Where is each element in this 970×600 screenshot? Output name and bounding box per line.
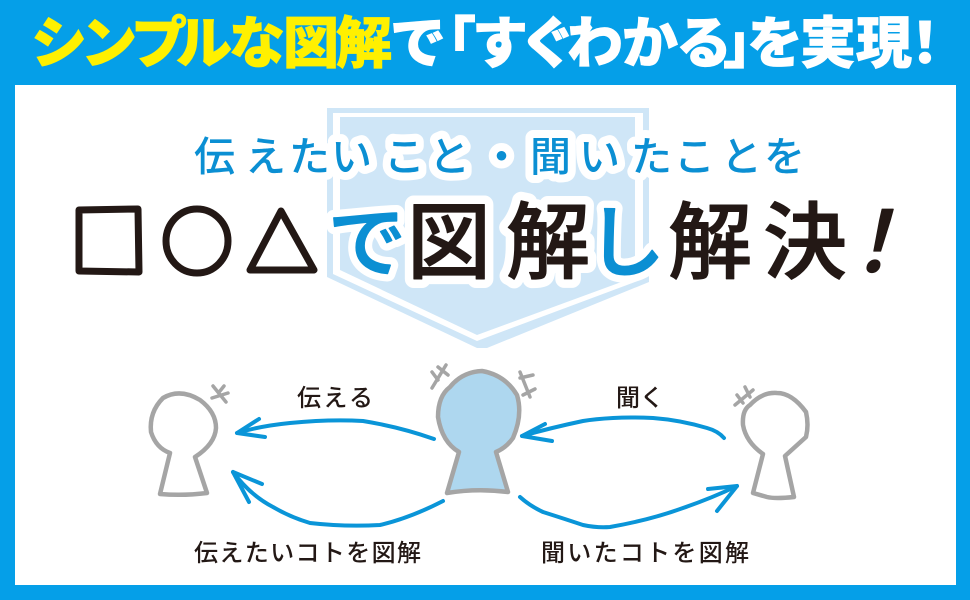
headline text: zukai: 図解 [407, 196, 590, 290]
person center [432, 365, 535, 493]
title banner: で「すぐわかる」を実現！ [390, 12, 953, 75]
subtitle: what you want to tell, what you heard: 伝えたいこと・聞いたことを [194, 134, 805, 180]
headline text: zukai: 図解 [407, 196, 590, 290]
shield background shape [327, 108, 649, 348]
label: illustrate what you heard: 聞いたコトを図解 [541, 540, 749, 567]
label: listen: 聞く [616, 385, 664, 412]
title banner [31, 12, 953, 75]
person left [151, 386, 228, 495]
arrow: illustrate what you heard [520, 486, 737, 527]
label: tell: 伝える [297, 385, 373, 412]
headline text: kaiketsu: 解決！ [668, 196, 914, 290]
headline text: de: で [328, 199, 406, 287]
headline shapes: square, circle, triangle [79, 209, 314, 273]
headline text: shi: し [587, 199, 665, 287]
arrow: illustrate what you want to tell [233, 472, 443, 526]
person right [735, 387, 808, 498]
label: illustrate what you want to tell: 伝えたいコトを図解 [194, 540, 421, 567]
headline text: shi: し [587, 199, 665, 287]
title banner: シンプルな図解 [31, 12, 392, 75]
headline text: de: で [328, 199, 406, 287]
arrow: listen [522, 418, 724, 441]
arrow: tell [237, 419, 434, 439]
subtitle: what you want to tell, what you heard: 伝えたいこと・聞いたことを [194, 134, 805, 180]
